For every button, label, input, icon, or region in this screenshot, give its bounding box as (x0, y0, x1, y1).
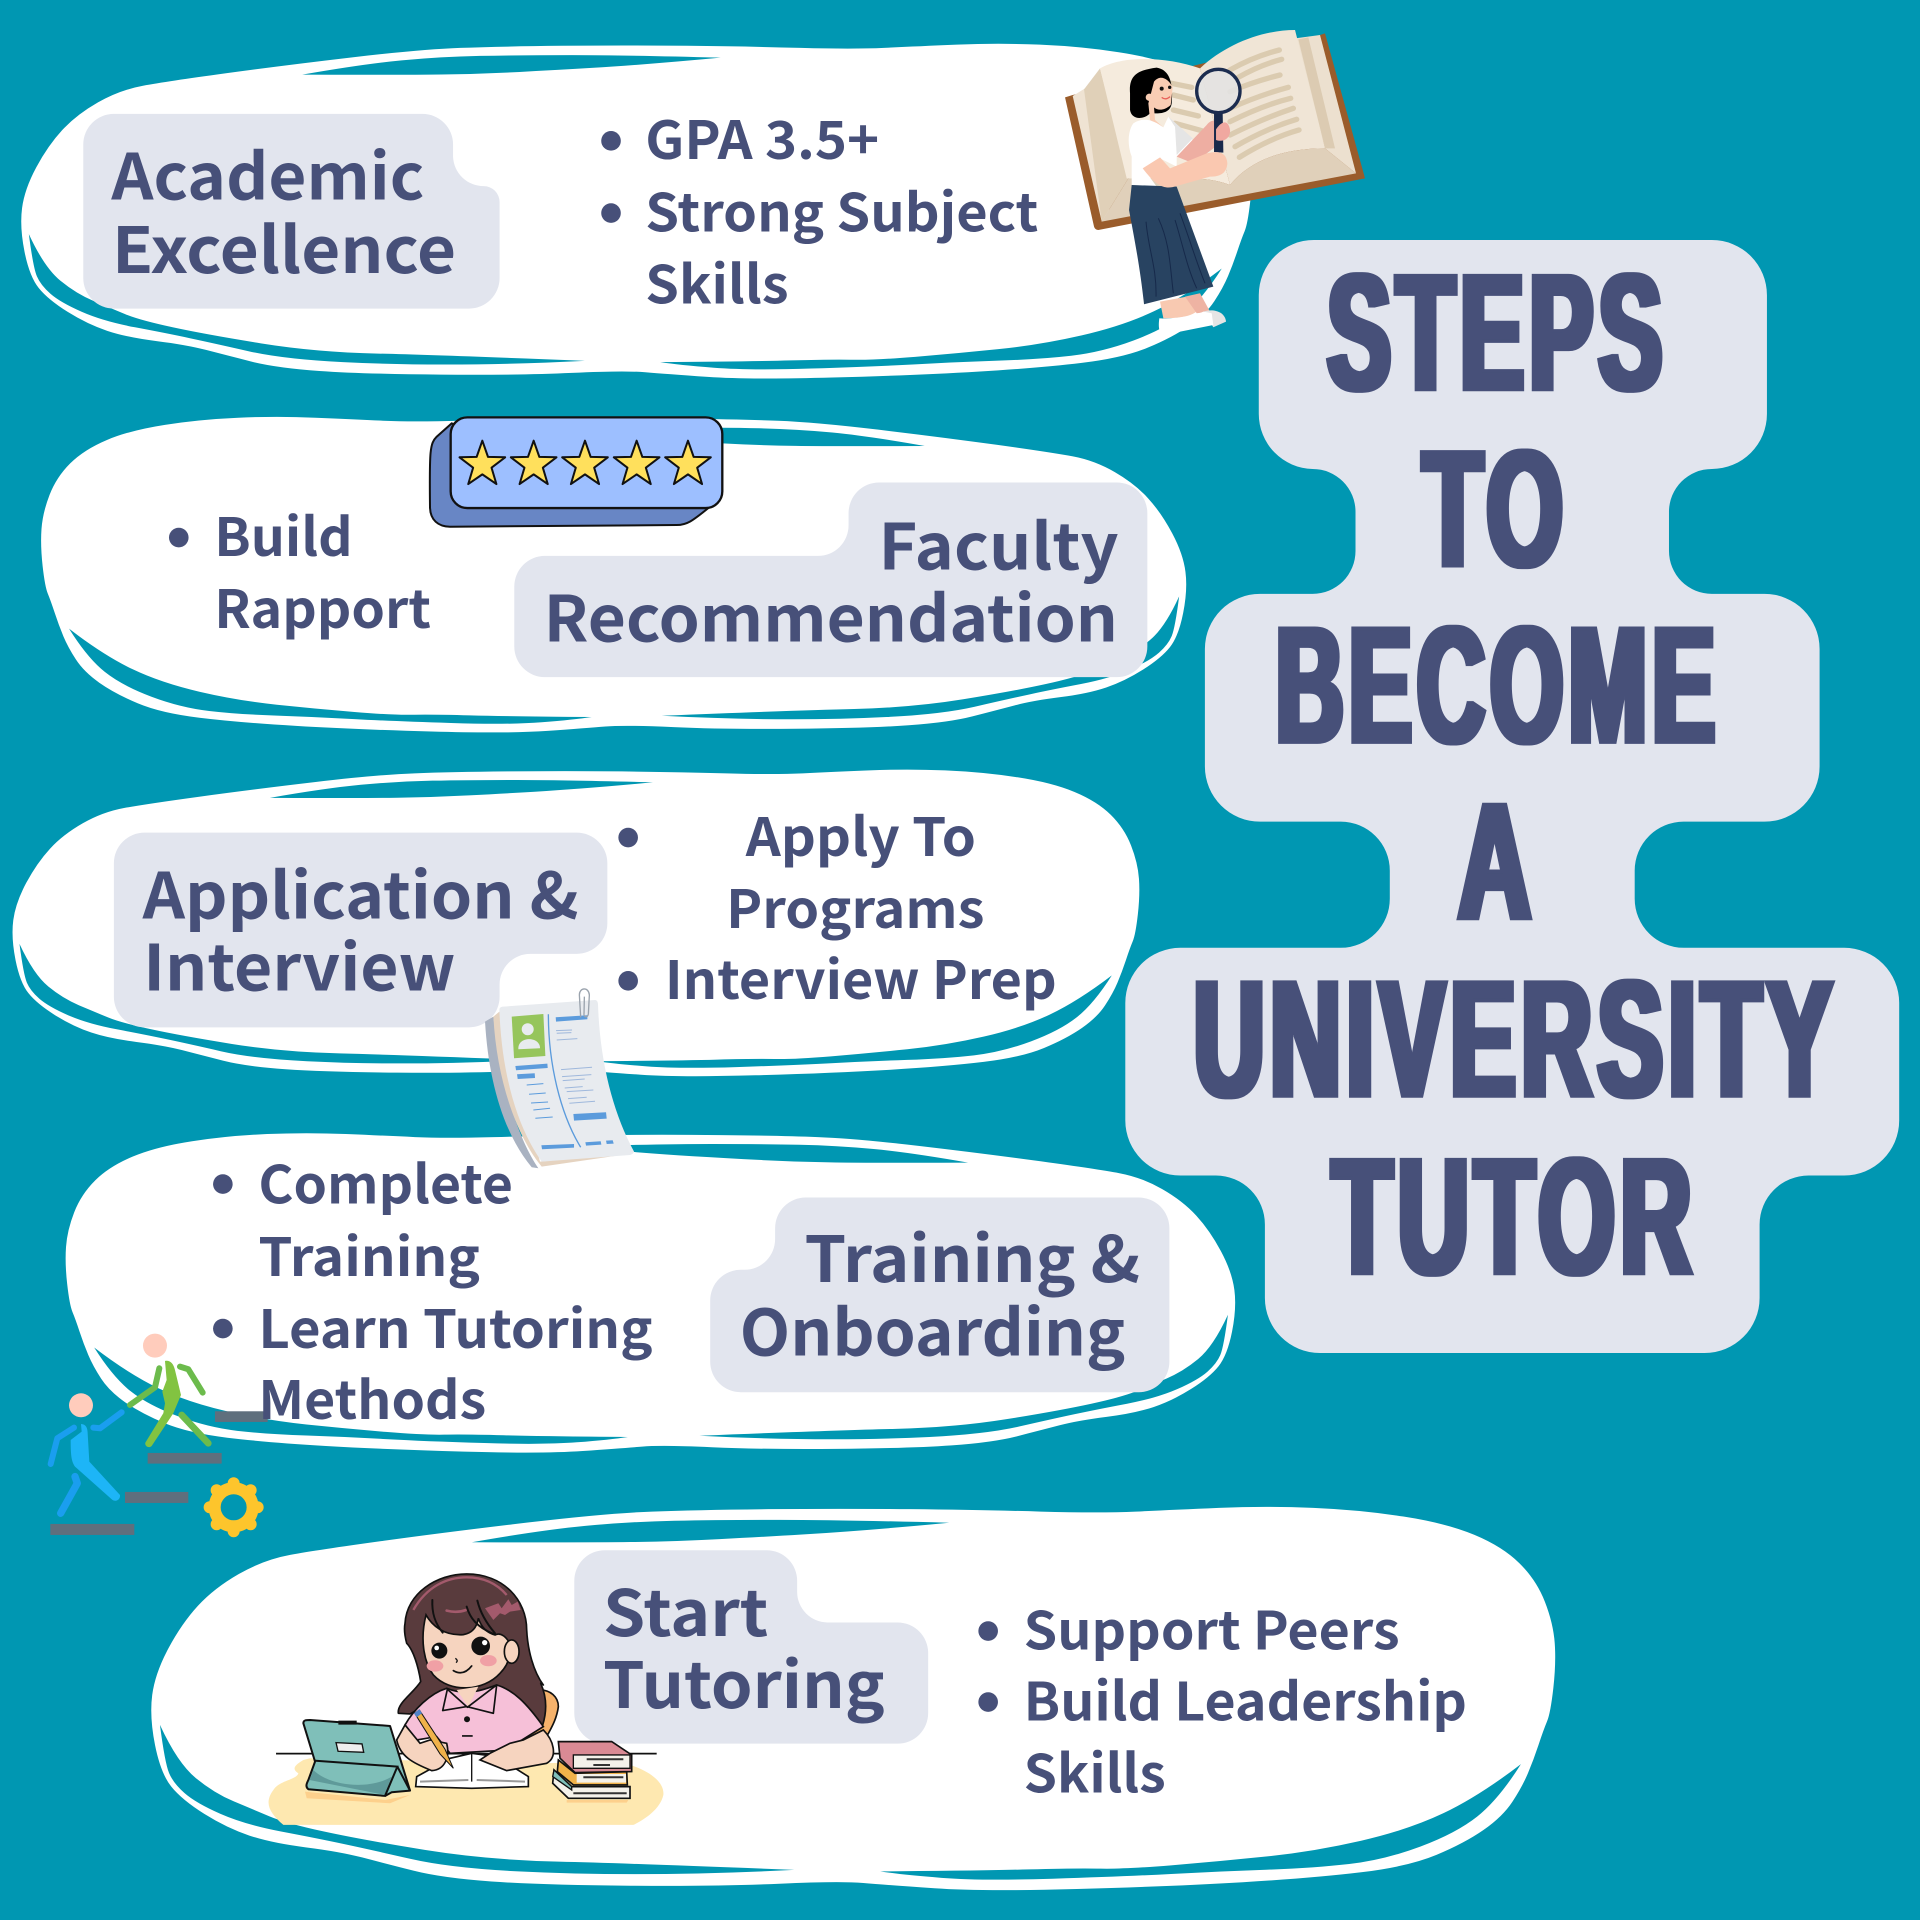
icon: people climbing steps with gear (50, 1334, 268, 1537)
bullet list: application and interview: Apply To (745, 796, 976, 872)
blob: training and onboarding (66, 1133, 1235, 1453)
bullet list: academic excellence: Strong Subject (645, 171, 1038, 247)
title: steps to become a university tutor: TO (1423, 417, 1569, 602)
bullet list: training and onboarding (213, 1144, 653, 1435)
bullet list: academic excellence: Skills (645, 244, 789, 320)
bullet list: faculty recommendation: Rapport (214, 568, 431, 644)
bullet list: faculty recommendation (169, 496, 431, 644)
icon: girl studying at desk (269, 1574, 663, 1825)
label: academic excellence (83, 114, 500, 309)
title: steps to become a university tutor (1125, 240, 1899, 1353)
label: start tutoring: Tutoring (603, 1635, 885, 1727)
blob: start tutoring (151, 1507, 1555, 1890)
icon: five star rating card (430, 417, 722, 527)
label: application and interview: Interview (143, 918, 456, 1010)
bullet list: academic excellence: GPA 3.5+ (645, 99, 879, 175)
bullet list: training and onboarding: Learn Tutoring (258, 1288, 653, 1364)
bullet list: start tutoring: Support Peers (1024, 1589, 1400, 1665)
label: faculty recommendation (514, 482, 1147, 677)
title: steps to become a university tutor: A (1458, 769, 1537, 954)
bullet list: application and interview (618, 796, 1057, 1015)
blob: academic excellence (21, 44, 1252, 379)
bullet list: faculty recommendation: Build (214, 496, 353, 572)
panel: application and interview (13, 770, 1139, 1076)
label: academic excellence: Excellence (112, 200, 456, 292)
bullet list: start tutoring: Skills (1024, 1733, 1166, 1809)
bullet list: application and interview: Interview Prep (665, 939, 1057, 1015)
bullet list: training and onboarding: Training (258, 1216, 480, 1292)
blob: application and interview (13, 770, 1139, 1076)
title: steps to become a university tutor: STEPS (1327, 240, 1668, 425)
label: academic excellence: Academic (110, 127, 424, 219)
label: training and onboarding (710, 1198, 1169, 1392)
bullet list: academic excellence (601, 99, 1038, 320)
bullet list: training and onboarding: Complete (258, 1144, 513, 1220)
panel: faculty recommendation (41, 417, 1186, 732)
label: application and interview (114, 833, 607, 1027)
bullet list: start tutoring (978, 1589, 1467, 1809)
label: application and interview: Application & (142, 845, 579, 937)
label: faculty recommendation: Faculty (879, 496, 1119, 588)
label: training and onboarding: Onboarding (740, 1283, 1125, 1375)
label: start tutoring: Start (603, 1563, 768, 1655)
blob: faculty recommendation (41, 417, 1186, 732)
bullet list: start tutoring: Build Leadership (1024, 1660, 1467, 1736)
panel: academic excellence (21, 30, 1365, 379)
icon: resume with paperclip (485, 989, 634, 1168)
label: faculty recommendation: Recommendation (544, 569, 1118, 661)
panel: training and onboarding (50, 1133, 1235, 1537)
label: start tutoring (574, 1550, 928, 1744)
icon: woman with magnifier and open book (1065, 30, 1365, 335)
panel: start tutoring (151, 1507, 1555, 1890)
bullet list: training and onboarding: Methods (258, 1359, 486, 1435)
label: training and onboarding: Training & (804, 1209, 1140, 1301)
bullet list: application and interview: Programs (726, 868, 984, 944)
